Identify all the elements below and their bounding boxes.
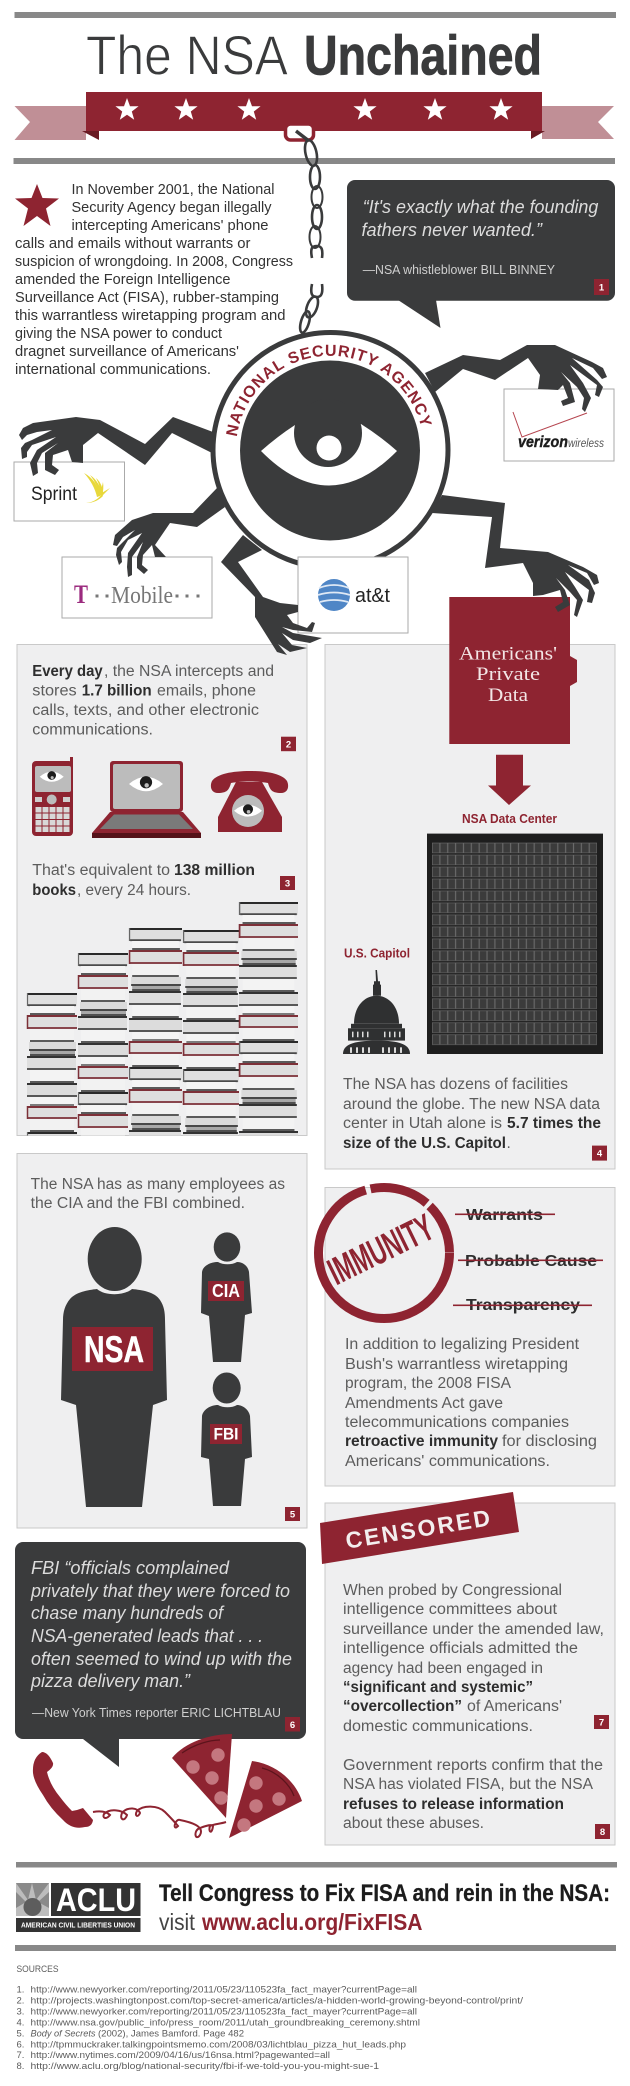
quote attribution: —NSA whistleblower BILL BINNEY: [363, 263, 556, 277]
logo: T-Mobile: Mobile: [111, 583, 173, 609]
intro paragraph: dragnet surveillance of Americans': [15, 344, 239, 360]
logo: T-Mobile: [62, 557, 212, 618]
quote bubble 1: fathers never wanted.”: [362, 219, 543, 240]
books text: 138 million: [174, 862, 255, 879]
intro paragraph: [15, 182, 293, 378]
sources list: http://www.nsa.gov/public_info/press_room/2011/utah_groundbreaking_ceremony.shtml: [30, 2018, 420, 2029]
data center block: [427, 834, 603, 1054]
intro paragraph: giving the NSA power to conduct: [15, 326, 222, 342]
quote bubble 6: often seemed to wind up with the: [31, 1648, 292, 1669]
footnote 7: 7: [599, 1718, 604, 1728]
facilities text: 5.7 times the: [507, 1115, 601, 1132]
folder: Americans' Private Data: Americans': [459, 644, 557, 664]
folder: Americans' Private Data: Data: [488, 685, 529, 706]
logo: AT&T: [298, 557, 408, 633]
sources list: 3.: [16, 2007, 24, 2018]
footnote 1: 1: [599, 282, 605, 294]
figure: CIA: CIA: [212, 1281, 240, 1301]
intro paragraph: intercepting Americans' phone: [72, 218, 268, 234]
sources list: 1.: [16, 1985, 24, 1996]
icon: pizza slice 2: [229, 1761, 302, 1838]
footnote 5: [285, 1507, 300, 1521]
quote bubble 1: [347, 180, 615, 328]
label: U.S. Capitol: U.S. Capitol: [344, 947, 410, 961]
censored text 2: about these abuses.: [343, 1815, 484, 1832]
logo: T-Mobile: T: [74, 580, 88, 609]
struck word: Transparency: Transparency: [466, 1297, 580, 1314]
struck word: Warrants: [455, 1207, 555, 1224]
struck word: Probable Cause: Probable Cause: [465, 1253, 597, 1270]
quote bubble 6: privately that they were forced to: [30, 1580, 290, 1601]
quote bubble 6: pizza delivery man.”: [30, 1670, 191, 1691]
panel: daily interception: [16, 644, 308, 1136]
quote bubble 1: “It's exactly what the founding: [363, 196, 599, 217]
intro paragraph: amended the Foreign Intelligence: [15, 272, 231, 288]
employees text: The NSA has as many employees as: [31, 1176, 285, 1193]
arm and hand: T-Mobile: [113, 488, 225, 577]
daily text: , the NSA intercepts and: [104, 663, 274, 680]
censored band: [320, 1492, 519, 1564]
logo: ACLU: ACLU: [56, 1882, 136, 1918]
icon: phone handset and cord: [33, 1752, 226, 1837]
sources list: 6.: [16, 2039, 24, 2050]
books text: [32, 862, 255, 899]
figure: FBI: FBI: [214, 1426, 238, 1444]
footnote 7: [594, 1715, 609, 1729]
stamp: immunity: [318, 1188, 450, 1318]
intro paragraph: calls and emails without warrants or: [15, 236, 251, 252]
title: Unchained: [304, 24, 542, 87]
ribbon banner: [14, 92, 614, 140]
censored text 1: “significant and systemic”: [343, 1679, 533, 1696]
sources list: [16, 1985, 523, 2072]
footnote 6: [285, 1717, 300, 1732]
facilities text: .: [506, 1135, 511, 1152]
figure: NSA: NSA: [84, 1329, 144, 1370]
struck word: Warrants: Warrants: [466, 1207, 543, 1224]
immunity text: retroactive immunity: [345, 1433, 498, 1450]
books text: That's equivalent to: [32, 862, 170, 879]
censored text 2: refuses to release information: [343, 1796, 564, 1813]
call to action: www.aclu.org/FixFISA: [201, 1909, 422, 1935]
employees text: the CIA and the FBI combined.: [31, 1195, 245, 1212]
book stacks chart: [26, 902, 298, 1136]
censored text 1: domestic communications.: [343, 1718, 533, 1735]
daily text: communications.: [32, 721, 153, 738]
immunity text: program, the 2008 FISA: [345, 1375, 512, 1392]
daily text: emails, phone: [157, 682, 256, 699]
second divider: [14, 158, 615, 164]
daily text: [32, 663, 274, 738]
divider above call to action: [16, 1862, 617, 1868]
quote attribution: —New York Times reporter ERIC LICHTBLAU: [32, 1706, 281, 1720]
divider below call to action: [15, 1945, 616, 1951]
immunity text: Amendments Act gave: [345, 1395, 503, 1412]
daily text: Every day: [32, 663, 103, 680]
censored text 1: When probed by Congressional: [343, 1582, 562, 1599]
footnote 3: 3: [285, 878, 290, 890]
title: The NSA: [86, 24, 289, 87]
panel: immunity: [318, 1188, 615, 1486]
figure: CIA: [201, 1232, 252, 1362]
top divider: [14, 12, 616, 18]
arrow down: [488, 755, 531, 805]
sources list: 8.: [16, 2061, 24, 2072]
immunity text: In addition to legalizing President: [345, 1336, 580, 1353]
footnote 2: [281, 737, 296, 751]
footnote 4: 4: [597, 1148, 603, 1160]
intro paragraph: international communications.: [15, 362, 211, 378]
seal text: NATIONAL SECURITY AGENCY: [226, 344, 432, 436]
sources list: http://www.aclu.org/blog/national-security/fbi-if-we-told-you-you-might-sue-1: [30, 2061, 379, 2072]
banner stars: [115, 98, 513, 120]
sources list: 7.: [16, 2050, 24, 2061]
censored text 1: “overcollection”: [343, 1698, 462, 1715]
sources list: http://projects.washingtonpost.com/top-secret-america/articles/a-hidden-world-growing-beyond-control/print/: [30, 1996, 523, 2007]
footnote 8: [595, 1824, 610, 1839]
arm and hand: Sprint: [19, 417, 213, 476]
panel: data center: [325, 597, 615, 1169]
logo: Verizon: [504, 389, 614, 461]
icon: laptop: [92, 761, 201, 838]
immunity text: [345, 1336, 597, 1470]
panel: employees: [17, 1154, 307, 1528]
censored text 1: intelligence committees about: [343, 1601, 558, 1618]
arm and hand: data folder: [432, 495, 599, 617]
title: [86, 24, 542, 87]
folder: Americans' Private Data: [449, 597, 577, 744]
facilities text: The NSA has dozens of facilities: [343, 1076, 568, 1093]
sources list: http://www.newyorker.com/reporting/2011/05/23/110523fa_fact_mayer?currentPage=all: [30, 1985, 417, 1996]
call to action: visit: [159, 1909, 196, 1935]
panel: censored: [320, 1492, 615, 1845]
immunity text: Bush's warrantless wiretapping: [345, 1356, 568, 1373]
censored text 1: intelligence officials admitted the: [343, 1640, 578, 1657]
immunity text: telecommunications companies: [345, 1414, 569, 1431]
intro paragraph: In November 2001, the National: [72, 182, 274, 198]
facilities text: around the globe. The new NSA data: [343, 1096, 600, 1113]
intro paragraph: Surveillance Act (FISA), rubber-stamping: [15, 290, 279, 306]
icon: chain from banner to eye: [286, 124, 322, 334]
sources list: Body of Secrets: [30, 2028, 96, 2039]
intro star icon: [15, 184, 59, 226]
logo: ACLU: AMERICAN CIVIL LIBERTIES UNION: [21, 1920, 135, 1930]
logo: Sprint: Sprint: [31, 484, 78, 505]
logo: Verizon: verizon: [518, 434, 568, 451]
icon: telephone: [211, 771, 288, 832]
logo: Sprint: [14, 462, 124, 521]
sources list: 2.: [16, 1996, 24, 2007]
icon: mobile phone: [32, 757, 73, 836]
intro paragraph: this warrantless wiretapping program and: [15, 308, 286, 324]
intro paragraph: Security Agency began illegally: [72, 200, 272, 216]
books text: , every 24 hours.: [77, 882, 191, 899]
facilities text: center in Utah alone is: [343, 1115, 502, 1132]
stamp: immunity: IMMUNITY: [322, 1207, 441, 1294]
facilities text: size of the U.S. Capitol: [343, 1135, 506, 1152]
sources list: (2002), James Bamford. Page 482: [98, 2028, 244, 2039]
censored text 2: Government reports confirm that the: [343, 1757, 603, 1774]
footnote 6: 6: [290, 1720, 295, 1731]
facilities text: [343, 1076, 601, 1152]
arm and hand: Verizon: [425, 345, 607, 412]
sources list: 4.: [16, 2018, 24, 2029]
folder: Americans' Private Data: Private: [476, 664, 540, 685]
footnote 2: 2: [286, 740, 291, 750]
logo: AT&T: at&t: [355, 585, 390, 607]
figure: FBI: [201, 1372, 252, 1506]
censored text 1: of Americans': [467, 1698, 562, 1715]
censored text 2: [343, 1757, 603, 1832]
arm and hand: AT&T: [221, 535, 322, 655]
books text: books: [32, 882, 76, 899]
quote bubble 6: chase many hundreds of: [31, 1602, 225, 1623]
intro paragraph: suspicion of wrongdoing. In 2008, Congress: [15, 254, 293, 270]
footnote 1: [594, 279, 609, 295]
footnote 4: [592, 1146, 607, 1161]
footnote 5: 5: [290, 1510, 296, 1520]
immunity text: for disclosing: [502, 1433, 597, 1450]
censored text 2: NSA has violated FISA, but the NSA: [343, 1776, 594, 1793]
NSA seal: [210, 330, 450, 566]
footnote 8: 8: [600, 1827, 605, 1838]
censored text 1: surveillance under the amended law,: [343, 1621, 604, 1638]
sources list: http://www.nytimes.com/2009/04/16/us/16nsa.html?pagewanted=all: [30, 2050, 330, 2061]
censored text 1: [343, 1582, 604, 1735]
sources list: http://www.newyorker.com/reporting/2011/05/23/110523fa_fact_mayer?currentPage=all: [30, 2007, 417, 2018]
footnote 3: [280, 876, 295, 890]
daily text: 1.7 billion: [82, 682, 152, 699]
censored text 1: agency had been engaged in: [343, 1660, 543, 1677]
censored band: CENSORED: [344, 1504, 492, 1554]
quote bubble 6: [15, 1542, 306, 1767]
icon: pizza slice 1: [172, 1734, 232, 1818]
logo: Verizon: wireless: [568, 436, 604, 450]
sources list: 5.: [16, 2028, 24, 2039]
figure: NSA: [61, 1227, 167, 1507]
sources list: http://tpmmuckraker.talkingpointsmemo.com/2008/03/lichtblau_pizza_hut_leads.php: [30, 2039, 406, 2050]
icon: capitol dome: [343, 970, 410, 1054]
quote bubble 6: FBI “officials complained: [31, 1557, 230, 1578]
employees text: [31, 1176, 285, 1212]
logo: ACLU: [16, 1882, 140, 1932]
immunity text: Americans' communications.: [345, 1453, 550, 1470]
call to action: [159, 1880, 610, 1935]
daily text: calls, texts, and other electronic: [32, 702, 259, 719]
daily text: stores: [32, 682, 77, 699]
quote bubble 6: NSA-generated leads that . . .: [31, 1625, 263, 1646]
sources: SOURCES: [16, 1964, 58, 1975]
label: NSA Data Center: NSA Data Center: [462, 812, 557, 826]
sources: [16, 1964, 523, 2072]
eye: [261, 399, 397, 486]
